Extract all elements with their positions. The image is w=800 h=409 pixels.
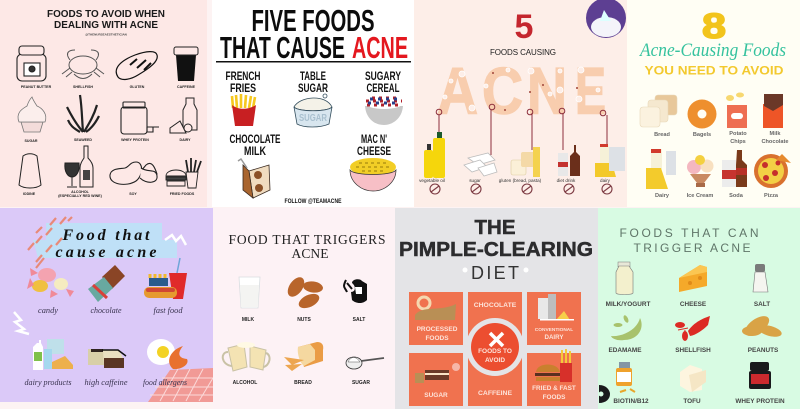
white zigzag decorations — [14, 235, 186, 334]
label: peanuts: PEANUTS — [748, 347, 779, 354]
icon: alcohol wine glass and bottle — [65, 146, 93, 187]
tile: fried and fast foods: FRIED & FAST — [532, 385, 576, 392]
label: french fries — [226, 71, 260, 95]
heading: five foods that cause acne: ACNE — [352, 30, 408, 65]
label: table sugar: SUGAR — [298, 83, 329, 95]
heading: the pimple-clearing diet — [399, 217, 593, 283]
heading: five foods that cause acne: THAT CAUSE — [220, 30, 345, 65]
label: soda: Soda — [729, 193, 744, 199]
labels and no signs: sugar — [469, 178, 481, 183]
icon: dairy milk and cheese — [170, 98, 197, 133]
heading: the pimple-clearing diet: DIET — [471, 263, 519, 283]
label: potato chips: Potato — [729, 131, 747, 137]
panel: food that triggers acne — [213, 208, 395, 409]
label: food allergens: food allergens — [143, 377, 188, 387]
icon: chocolate milk carton — [238, 159, 270, 198]
icon: diet drink — [558, 145, 580, 176]
icon: peanut butter — [17, 46, 46, 81]
icon: iodine salt shaker — [19, 154, 41, 188]
icon: whey protein tub — [121, 102, 159, 134]
number 8: 8 — [702, 7, 726, 46]
label: table sugar: TABLE — [300, 71, 326, 83]
icon: soda — [722, 150, 747, 187]
labels and no signs: dairy — [600, 178, 611, 183]
label: peanut butter: PEANUT BUTTER — [21, 85, 52, 89]
label: sugary cereal: CEREAL — [366, 83, 400, 95]
center badge: foods to avoid — [466, 318, 524, 376]
label: dairy: DAIRY — [179, 138, 191, 142]
panel: food that cause acne — [0, 208, 213, 402]
labels and no signs: vegetable oil — [419, 178, 445, 183]
icon: salt shaker — [753, 264, 768, 292]
icon: dairy products — [33, 339, 73, 370]
panel: five foods that cause acne — [212, 0, 414, 207]
label: chocolate milk — [230, 134, 281, 158]
icon: milk chocolate — [763, 94, 783, 128]
icon: edamame — [611, 315, 642, 340]
tile: processed foods: PROCESSED — [417, 326, 458, 333]
icon: pizza — [754, 154, 791, 188]
labels and no signs — [419, 178, 612, 194]
icon: potato chips — [726, 92, 747, 128]
icon: sugar bowl — [294, 94, 332, 127]
icon: peanuts — [742, 312, 783, 340]
icon: milk glass — [239, 277, 260, 308]
icon: sugar cubes — [464, 153, 497, 176]
label: mac n cheese — [357, 134, 391, 158]
icon: biotin bottle — [616, 362, 635, 392]
tile: conventional dairy — [527, 292, 581, 345]
heading: food that cause acne — [56, 227, 156, 261]
icon: tofu — [680, 365, 706, 392]
acne letters with spots: C — [482, 54, 523, 128]
label: table sugar — [298, 71, 329, 95]
label: milk yogurt: MILK/YOGURT — [606, 301, 650, 308]
panel: foods to avoid when dealing with acne — [0, 0, 207, 207]
panel: the pimple-clearing diet — [395, 208, 598, 409]
badge: dark circle logo — [598, 385, 610, 403]
heading: food that triggers acne: FOOD THAT TRIGGERS — [228, 232, 386, 247]
label: bread: Bread — [654, 132, 671, 138]
heading: food that cause acne: Food that — [62, 227, 150, 244]
icon: whey protein tub — [749, 362, 771, 389]
label: mac n cheese: CHEESE — [357, 146, 391, 158]
labels and no signs: diet drink — [557, 178, 576, 183]
label: follow teamacne: FOLLOW @TEAMACNE — [284, 198, 342, 205]
tile: conventional dairy: DAIRY — [544, 334, 564, 341]
label: pizza: Pizza — [764, 193, 779, 199]
label: soy: SOY — [129, 192, 137, 196]
heading: the pimple-clearing diet: THE — [474, 217, 516, 239]
label: fried foods: FRIED FOODS — [170, 192, 195, 196]
panel: 5 foods causing acne — [414, 0, 627, 207]
label: seaweed: SEAWEED — [74, 138, 92, 142]
label: mac n cheese: MAC N' — [361, 134, 387, 146]
heading: foods to avoid: @THENURSEAESTHETICIAN — [85, 32, 127, 36]
heading: five foods that cause acne: FIVE FOODS — [252, 3, 374, 38]
heading: foods to avoid — [47, 8, 165, 36]
acne letters with spots — [437, 54, 606, 128]
label: biotin: BIOTIN/B12 — [613, 398, 649, 405]
label: nuts: NUTS — [297, 317, 311, 323]
connector lines — [436, 104, 607, 155]
label: milk chocolate: Chocolate — [761, 139, 789, 145]
label: sugar: SUGAR — [352, 380, 370, 386]
icon: fast food — [144, 258, 187, 299]
heading: foods that can trigger acne: FOODS THAT CAN — [620, 226, 758, 240]
label: milk: MILK — [242, 317, 254, 323]
panel: foods that can trigger acne — [598, 208, 800, 409]
icon: alcohol beer mugs — [223, 342, 270, 371]
label: high caffeine: high caffeine — [84, 377, 128, 387]
icon: ice cream — [687, 155, 714, 187]
heading: foods to avoid: FOODS TO AVOID WHEN — [47, 8, 165, 20]
label: alcohol: ALCOHOL — [233, 380, 257, 386]
label: ice cream: Ice Cream — [687, 193, 713, 199]
label: dairy: Dairy — [655, 193, 670, 199]
icon: sugar spoon — [346, 357, 384, 369]
label: milk chocolate: Milk — [770, 131, 781, 137]
label: milk chocolate — [761, 131, 789, 145]
label: salt: SALT — [754, 301, 770, 308]
label: chocolate milk: MILK — [244, 146, 267, 158]
tile: chocolate and caffeine column: CHOCOLATE — [474, 302, 517, 309]
labels and no signs: gluten (bread, pasta) — [499, 178, 542, 183]
label: cheese: CHEESE — [680, 301, 707, 308]
heading: foods to avoid: DEALING WITH ACNE — [54, 19, 158, 31]
label: tofu: TOFU — [683, 398, 701, 405]
heading: foods that can trigger acne — [620, 226, 758, 255]
heading: five foods that cause acne — [216, 3, 411, 65]
label: alcohol — [58, 190, 103, 198]
tile: processed foods — [409, 292, 463, 345]
label: fast food: fast food — [154, 305, 183, 315]
tile: fried and fast foods: FOODS — [543, 394, 566, 401]
acne letters with spots: N — [527, 54, 567, 128]
plaid corner pattern — [148, 368, 213, 402]
icon: soy beans — [110, 162, 157, 184]
icon: cheese — [679, 265, 707, 292]
icon: cereal bowl — [365, 97, 403, 125]
label: chocolate milk: CHOCOLATE — [230, 134, 281, 146]
icon: bread loaf — [284, 342, 323, 371]
logo badge — [586, 0, 626, 38]
title highlight and stripes — [28, 217, 177, 268]
tile: processed foods: FOODS — [425, 335, 449, 342]
label: alcohol: (ESPECIALLY RED WINE) — [58, 194, 103, 198]
label: sugar: SUGAR — [25, 139, 38, 143]
label: chocolate: chocolate — [90, 305, 122, 315]
icon: dairy — [646, 149, 676, 189]
label: salt: SALT — [353, 317, 365, 323]
label: candy: candy — [38, 305, 58, 315]
label: edamame: EDAMAME — [608, 347, 642, 354]
label: iodine: IODINE — [23, 192, 36, 196]
heading: acne-causing foods: Acne-Causing Foods — [638, 40, 786, 61]
tile: conventional dairy: CONVENTIONAL — [535, 327, 573, 333]
heading: the pimple-clearing diet: PIMPLE-CLEARING — [399, 239, 593, 261]
center badge: foods to avoid: FOODS TO — [478, 348, 512, 355]
number 5: 5 — [515, 8, 533, 46]
label: whey protein: WHEY PROTEIN — [121, 138, 149, 142]
label: gluten: GLUTEN — [130, 85, 145, 89]
label: whey protein: WHEY PROTEIN — [735, 398, 785, 405]
label: dairy products: dairy products — [24, 377, 72, 387]
label: caffeine: CAFFEINE — [177, 85, 196, 89]
icon: milk bottle — [616, 262, 633, 294]
tile: fried and fast foods — [527, 349, 581, 406]
icon: french fries — [232, 94, 256, 126]
label: potato chips: Chips — [730, 139, 746, 145]
label: french fries: FRENCH — [226, 71, 260, 83]
heading: you need to avoid: YOU NEED TO AVOID — [644, 64, 784, 78]
tile: chocolate and caffeine column — [468, 292, 522, 406]
heading: foods that can trigger acne: TRIGGER ACNE — [634, 241, 750, 255]
label: shellfish: SHELLFISH — [675, 347, 711, 354]
label: bread: BREAD — [294, 380, 312, 386]
heading: food that triggers acne: ACNE — [292, 246, 328, 261]
heading: food that triggers acne — [228, 232, 386, 261]
icon: dairy — [595, 144, 625, 177]
label: alcohol: ALCOHOL — [71, 190, 90, 194]
acne letters with spots: E — [575, 54, 606, 128]
icon: shellfish lobster — [675, 316, 710, 341]
label: french fries: FRIES — [230, 83, 256, 95]
panel: 8 acne-causing foods — [627, 0, 800, 207]
tile: sugar — [409, 353, 463, 406]
icon: food allergens — [147, 339, 188, 369]
tile: sugar: SUGAR — [424, 392, 448, 399]
label: bagels: Bagels — [693, 132, 711, 138]
icon: sugar bowl: SUGAR — [299, 113, 328, 124]
icon: mac and cheese bowl — [350, 158, 396, 191]
heading: food that cause acne: cause acne — [56, 244, 156, 261]
icon: shellfish — [62, 50, 104, 78]
acne letters with spots: A — [437, 54, 478, 128]
icon: high caffeine — [88, 349, 126, 368]
label: shellfish: SHELLFISH — [73, 85, 93, 89]
label: potato chips — [729, 131, 747, 145]
icon: seaweed — [67, 95, 99, 132]
icon: candy — [27, 268, 74, 298]
icon: gluten bread — [116, 52, 157, 79]
icon: chocolate — [88, 265, 125, 302]
icon: salt figure — [344, 279, 367, 303]
icon: bread — [640, 95, 677, 127]
label: sugary cereal — [365, 71, 401, 95]
icon: fried foods burger and fries — [166, 158, 201, 188]
heading: foods causing: FOODS CAUSING — [490, 48, 556, 57]
icon: cupcake sugar — [18, 97, 46, 132]
tile: chocolate and caffeine column: CAFFEINE — [478, 390, 512, 397]
icon: bagel — [688, 100, 716, 128]
icon: gluten bread and pasta — [511, 147, 540, 177]
icon: vegetable oil — [424, 132, 445, 178]
label: sugary cereal: SUGARY — [365, 71, 401, 83]
center badge: foods to avoid: AVOID — [485, 357, 505, 364]
icon: nuts almonds — [284, 274, 324, 311]
icon: caffeine cup — [174, 47, 198, 81]
